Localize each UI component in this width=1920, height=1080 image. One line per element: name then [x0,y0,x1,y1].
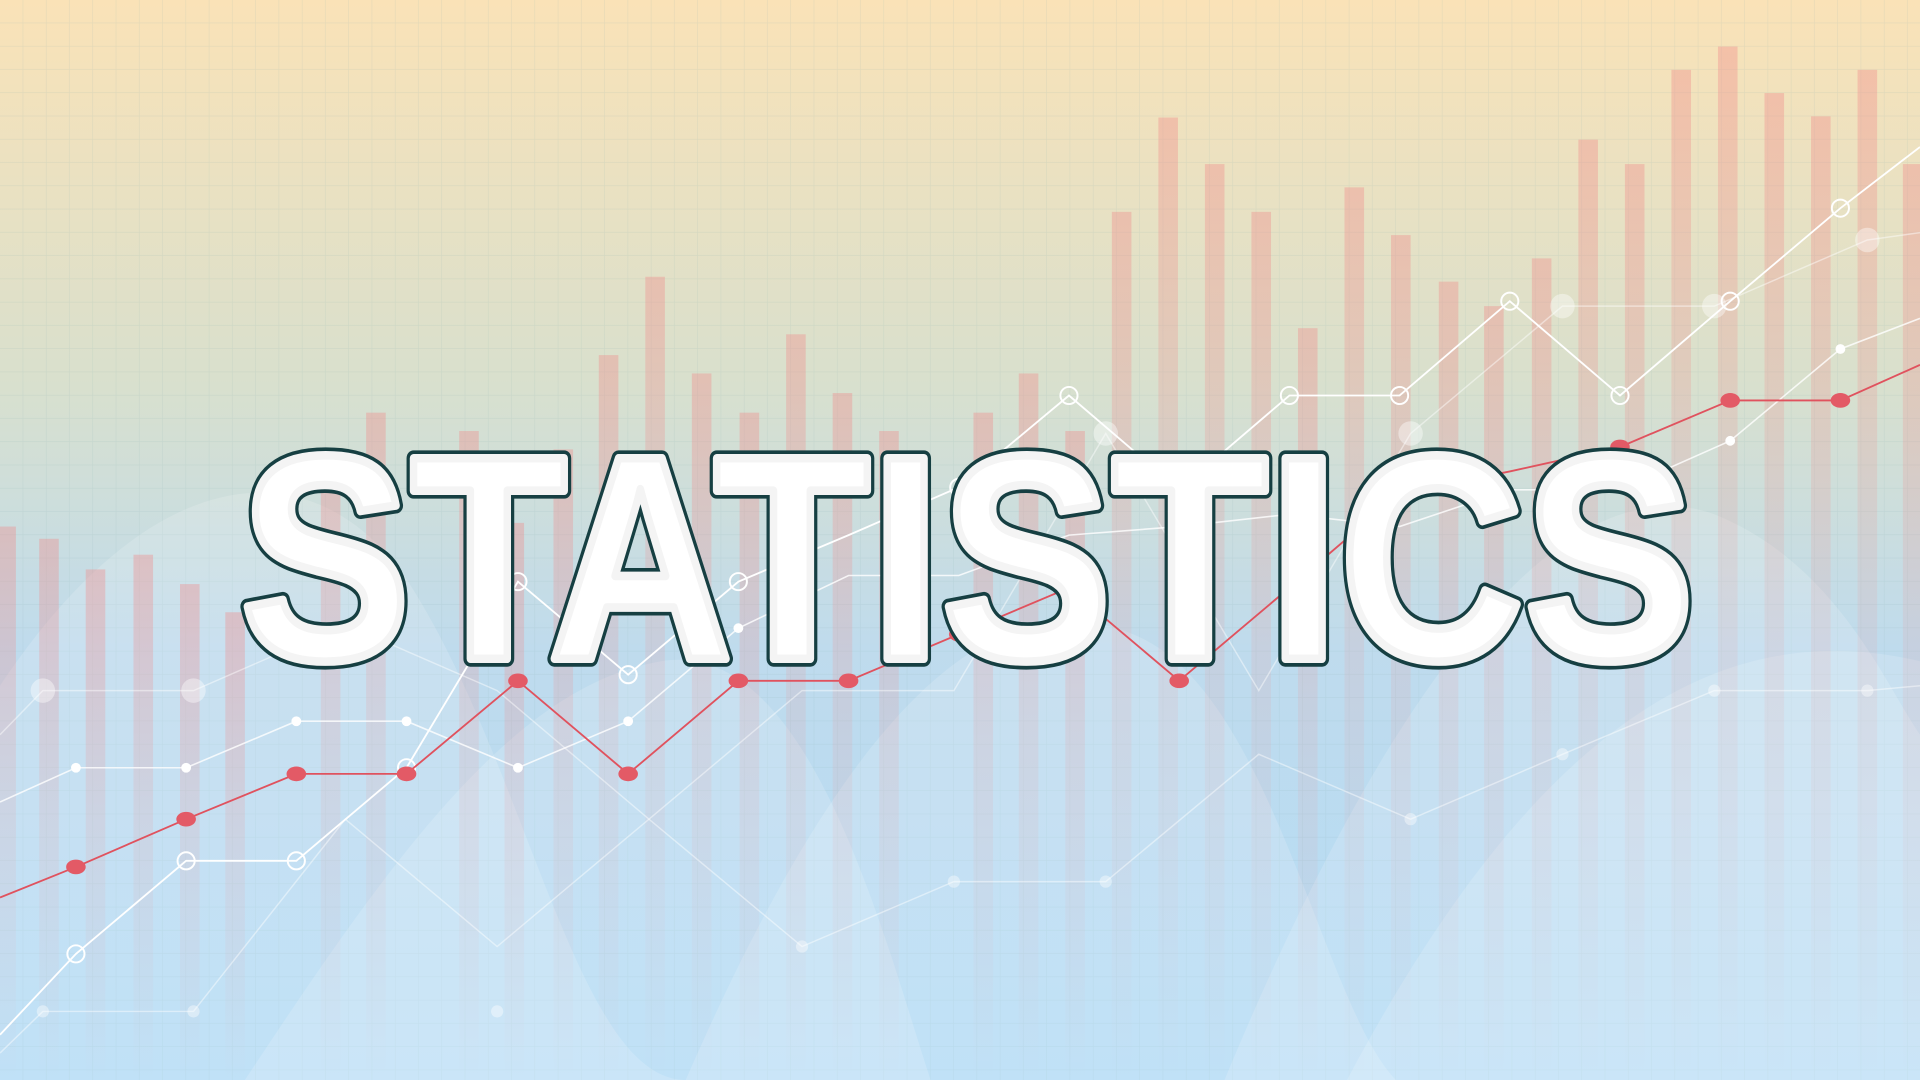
title: STATISTICS [240,395,1695,721]
faint line series [0,233,1920,1053]
red line chart [0,365,1920,898]
title: STATISTICS [240,395,1695,721]
wave shapes [0,493,1920,1080]
white line with small dots [0,318,1920,802]
